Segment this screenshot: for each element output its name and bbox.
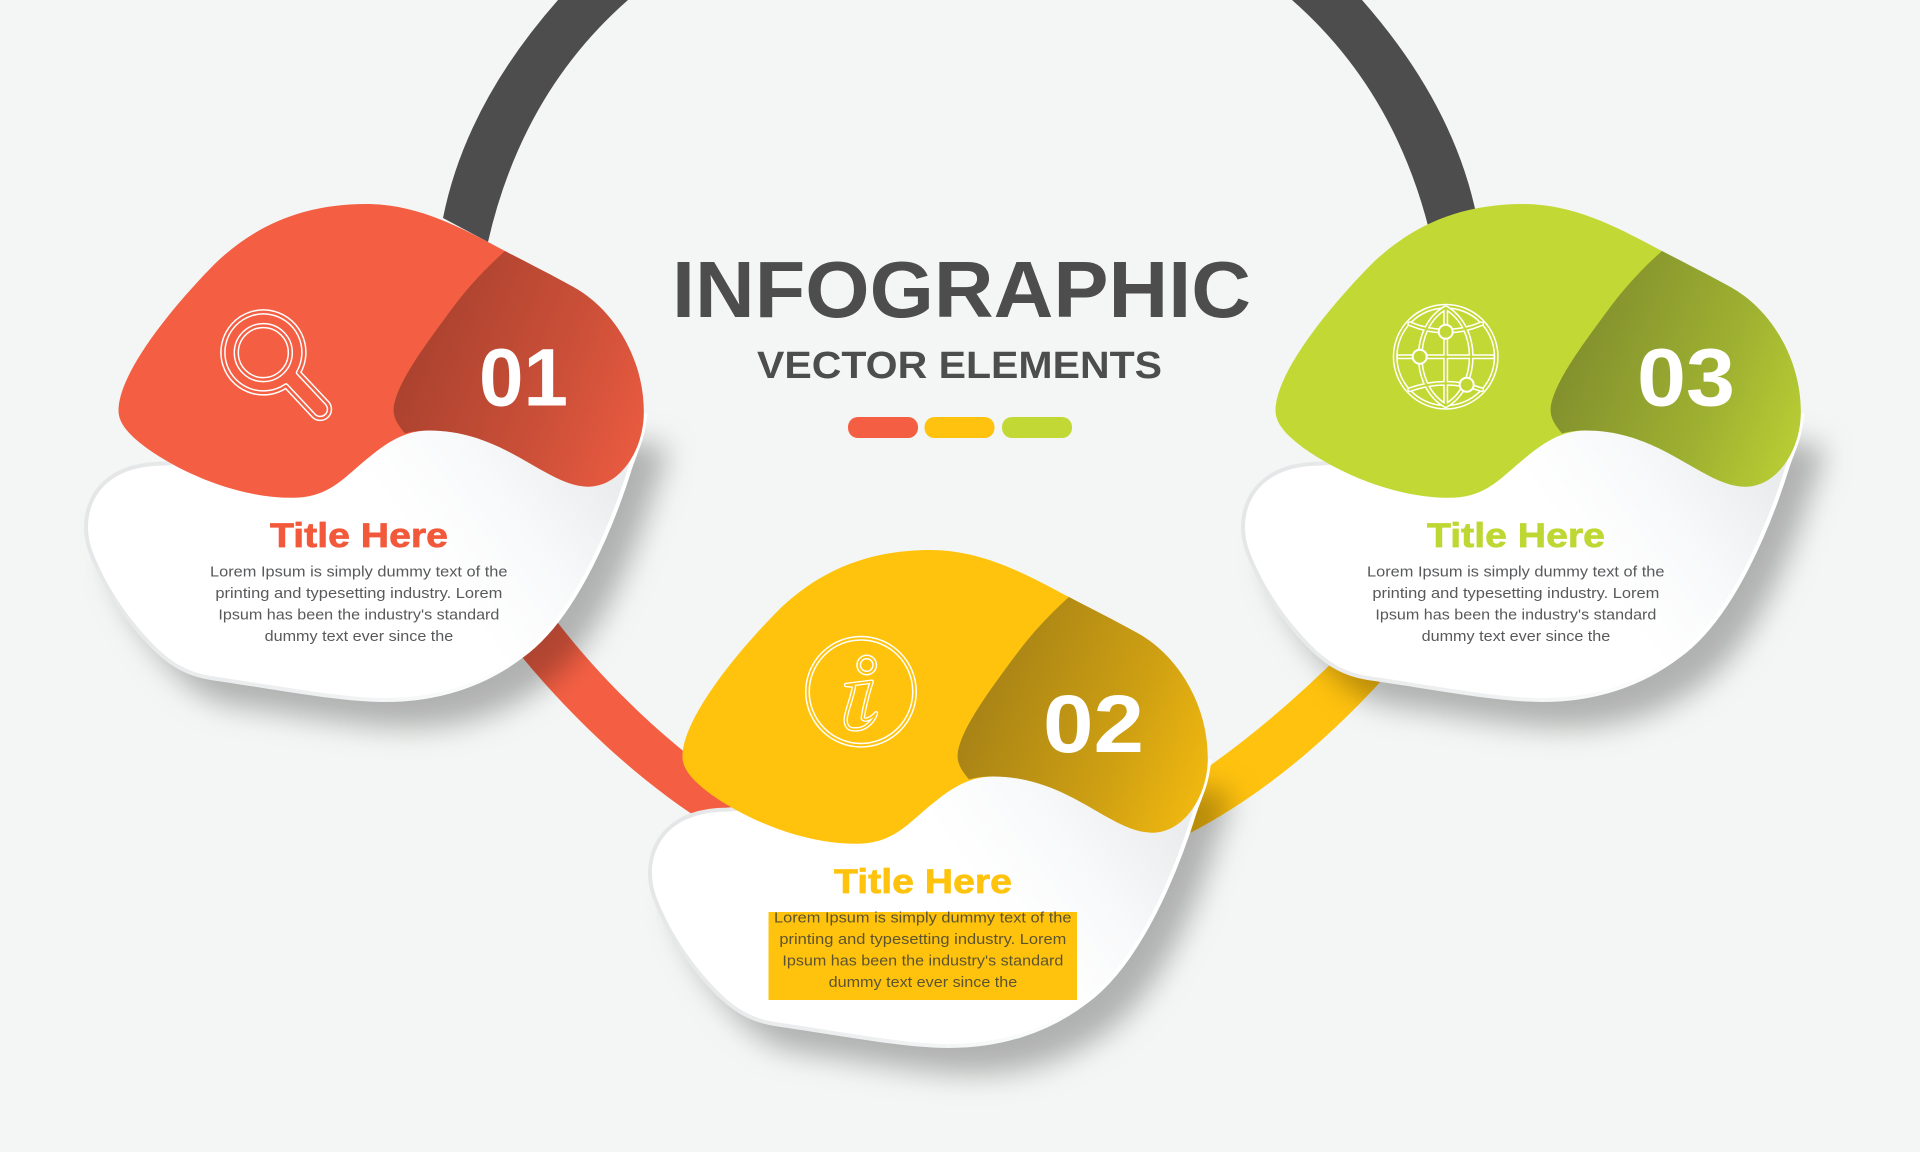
ring segment: top left dark [443, 0, 628, 242]
body text: Ipsum has been the industry's standard [1375, 606, 1656, 624]
body text: Ipsum has been the industry's standard [218, 606, 499, 624]
ring segment: red connector [510, 607, 745, 835]
subtitle: VECTOR ELEMENTS [757, 345, 1162, 387]
ring segment: top right dark [1292, 0, 1477, 242]
ring segment: yellow connector [1160, 650, 1400, 845]
heading: title here: Title Here [270, 517, 448, 555]
body text: printing and typesetting industry. Lorem [779, 931, 1066, 948]
icon: globe [1395, 306, 1496, 407]
text highlight box [768, 912, 1077, 1000]
icon: magnifying glass [223, 312, 329, 418]
number 03: 03 [1637, 332, 1735, 424]
number 02: 02 [1043, 679, 1144, 770]
body text: printing and typesetting industry. Lorem [1372, 585, 1659, 602]
body text: dummy text ever since the [265, 628, 453, 645]
body text: Ipsum has been the industry's standard [782, 952, 1063, 970]
body text: dummy text ever since the [829, 974, 1017, 991]
panel: step 02 [652, 550, 1231, 1074]
colour pills [848, 417, 1072, 438]
number 01: 01 [479, 332, 568, 424]
body text: Lorem Ipsum is simply dummy text of the [774, 910, 1072, 927]
panel: step 01 [88, 204, 667, 728]
body text [774, 910, 1072, 991]
main title: INFOGRAPHIC [672, 245, 1251, 334]
title block [672, 245, 1251, 438]
body text: Lorem Ipsum is simply dummy text of the [210, 564, 508, 581]
heading: title here: Title Here [834, 863, 1012, 901]
body text: Lorem Ipsum is simply dummy text of the [1367, 564, 1664, 581]
body text: printing and typesetting industry. Lorem [215, 585, 502, 602]
body text: dummy text ever since the [1422, 628, 1610, 645]
body text [210, 564, 508, 645]
body text [1367, 564, 1664, 645]
heading: title here: Title Here [1427, 517, 1605, 555]
panel: step 03 [1245, 204, 1824, 728]
icon: information [808, 638, 914, 745]
